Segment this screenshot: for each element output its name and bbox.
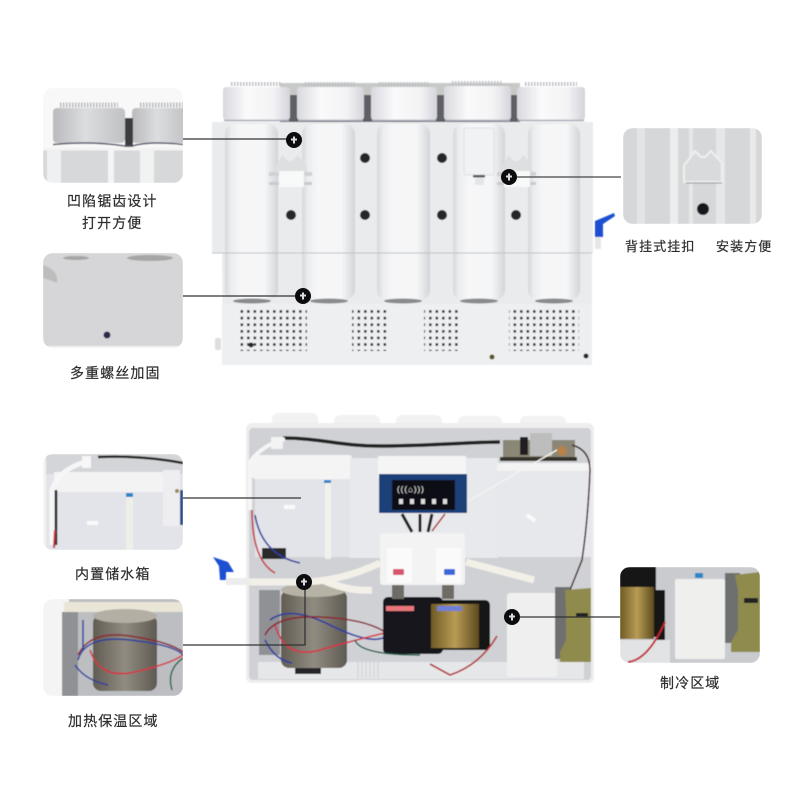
left water tank <box>252 455 352 559</box>
left hanging clip <box>269 155 312 187</box>
thumbnail: built-in water tank <box>43 454 183 550</box>
leader line: screws to thumbnail <box>183 295 303 297</box>
control wires <box>402 514 432 532</box>
marker: heater <box>296 574 312 590</box>
floor ribs <box>358 662 378 678</box>
heater wires <box>252 510 385 663</box>
pump <box>383 585 490 654</box>
thumbnail: wall-mounted clip <box>623 128 762 224</box>
leader line: heater to thumbnail <box>183 582 305 645</box>
marker: screws <box>295 288 311 304</box>
white water pipes <box>250 562 534 590</box>
service cover <box>464 128 494 175</box>
label: multiple screws: 多重螺丝加固 <box>70 365 161 381</box>
label: water tank: 内置储水箱 <box>75 566 150 582</box>
ventilation grids <box>237 310 579 351</box>
leader line: cooling to thumbnail <box>512 616 620 618</box>
white inlet pipe <box>250 439 285 510</box>
upper housing <box>212 122 593 253</box>
leader line: caps to thumbnail <box>183 138 294 140</box>
marker: clip <box>501 169 517 185</box>
heater tank <box>259 548 347 674</box>
leader line: tank to thumbnail <box>183 497 301 499</box>
casing <box>246 423 594 683</box>
pump leads <box>430 636 497 675</box>
middle tank section <box>350 458 498 558</box>
right side wire <box>570 445 590 590</box>
cartridge shadows <box>233 298 573 304</box>
marker: cooling <box>504 609 520 625</box>
label: easy to open: 打开方便 <box>82 215 142 231</box>
blue tap <box>595 213 615 237</box>
panel: rear view of purifier <box>212 83 615 365</box>
black water hose <box>283 438 500 446</box>
filter cartridges <box>225 124 580 300</box>
panel: inner view of purifier <box>213 413 594 683</box>
label: hanging clip: 背挂式挂扣 <box>625 239 696 254</box>
tops of filter caps <box>272 413 566 427</box>
marker: caps <box>286 132 302 148</box>
control board <box>379 474 467 513</box>
label: serrated design: 凹陷锯齿设计 <box>67 193 158 209</box>
thumbnail: reinforcing screws <box>43 253 183 348</box>
right hanging clip <box>497 155 536 187</box>
faucet block <box>380 533 465 585</box>
foam cooling box <box>507 593 557 677</box>
lower housing <box>222 253 592 365</box>
gaps between filter caps <box>280 83 520 123</box>
filter caps <box>223 83 585 120</box>
white tie line <box>470 450 557 500</box>
power board <box>500 433 577 461</box>
label: heating zone: 加热保温区域 <box>68 713 159 729</box>
transformer <box>555 587 591 662</box>
label: easy install: 安装方便 <box>716 239 772 254</box>
blue tap <box>213 557 234 580</box>
right water tank <box>497 463 592 557</box>
thumbnail: cooling zone <box>620 567 760 663</box>
side fitting <box>215 338 221 350</box>
control board: (((⌂))) <box>397 485 425 494</box>
leader line: clip to thumbnail <box>509 176 621 178</box>
mounting holes <box>286 153 521 220</box>
thumbnail: heating zone <box>43 599 183 696</box>
label: cooling zone: 制冷区域 <box>660 675 720 691</box>
thumbnail: recessed serrated caps <box>43 102 183 183</box>
